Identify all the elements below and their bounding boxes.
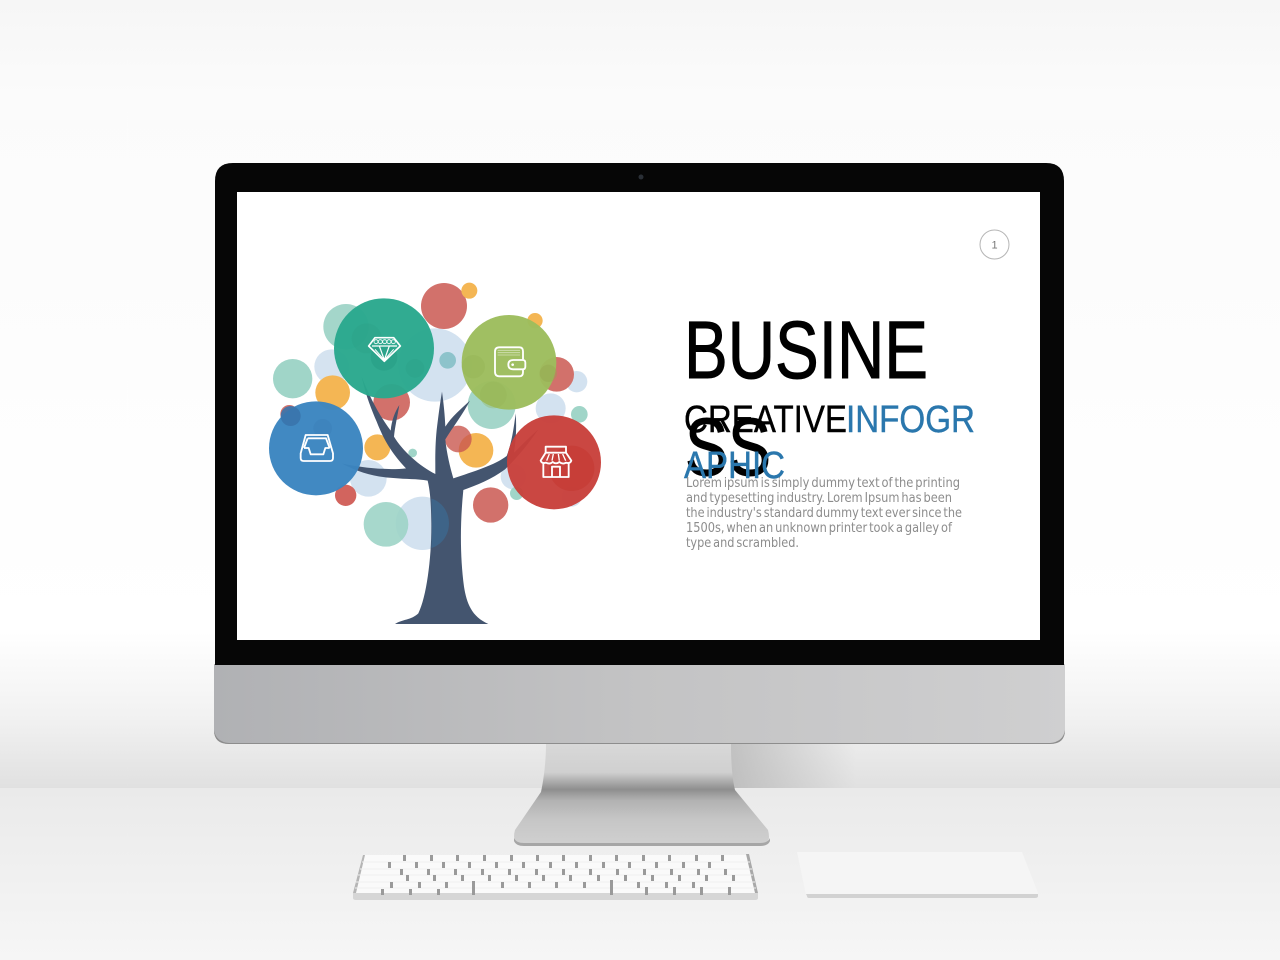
page number badge: 1 [991,240,998,252]
desk surface [0,788,1280,960]
red bubble with shop icon [507,415,601,509]
body paragraph: and typesetting industry. Lorem Ipsum has been [686,490,952,506]
lime bubble with wallet icon [462,315,557,410]
body paragraph: the industry's standard dummy text ever since the [686,505,962,521]
icon: inbox tray [301,435,333,461]
body paragraph [686,475,962,551]
body paragraph: type and scrambled. [686,535,799,551]
icon: storefront [541,447,571,477]
monitor [214,163,1065,846]
monitor silver chin [214,664,1065,744]
blue bubble with tray icon [269,401,363,495]
slide screen [237,192,1040,640]
icon: wallet [495,347,525,376]
monitor stand [514,744,770,846]
subheading: CREATIVE INFOGRAPHIC: APHIC [684,445,785,487]
tree trunk and branches [342,377,538,624]
body paragraph: Lorem ipsum is simply dummy text of the printing [686,475,960,491]
heading: BUSINESS wrapped: BUSINE [684,305,928,396]
body paragraph: 1500s, when an unknown printer took a galley of [686,520,953,536]
monitor shadow on wall [731,744,856,788]
keyboard key gaps [381,855,735,895]
keyboard [353,854,758,900]
subheading: CREATIVE INFOGRAPHIC: INFOGR [846,399,975,441]
heading: BUSINESS wrapped [684,305,928,493]
green bubble with diamond icon [334,298,434,398]
subheading: CREATIVE INFOGRAPHIC [684,399,975,487]
trackpad [797,852,1038,898]
icon: diamond [369,338,400,361]
subheading: CREATIVE INFOGRAPHIC: CREATIVE [684,399,847,441]
bubble overlay on trunk [431,499,449,548]
heading: BUSINESS wrapped: SS [685,402,771,493]
page number badge [980,230,1009,259]
background bubbles [273,283,588,550]
title text [684,305,975,493]
monitor black bezel [215,163,1064,665]
tree illustration [269,283,601,624]
webcam [638,174,644,180]
